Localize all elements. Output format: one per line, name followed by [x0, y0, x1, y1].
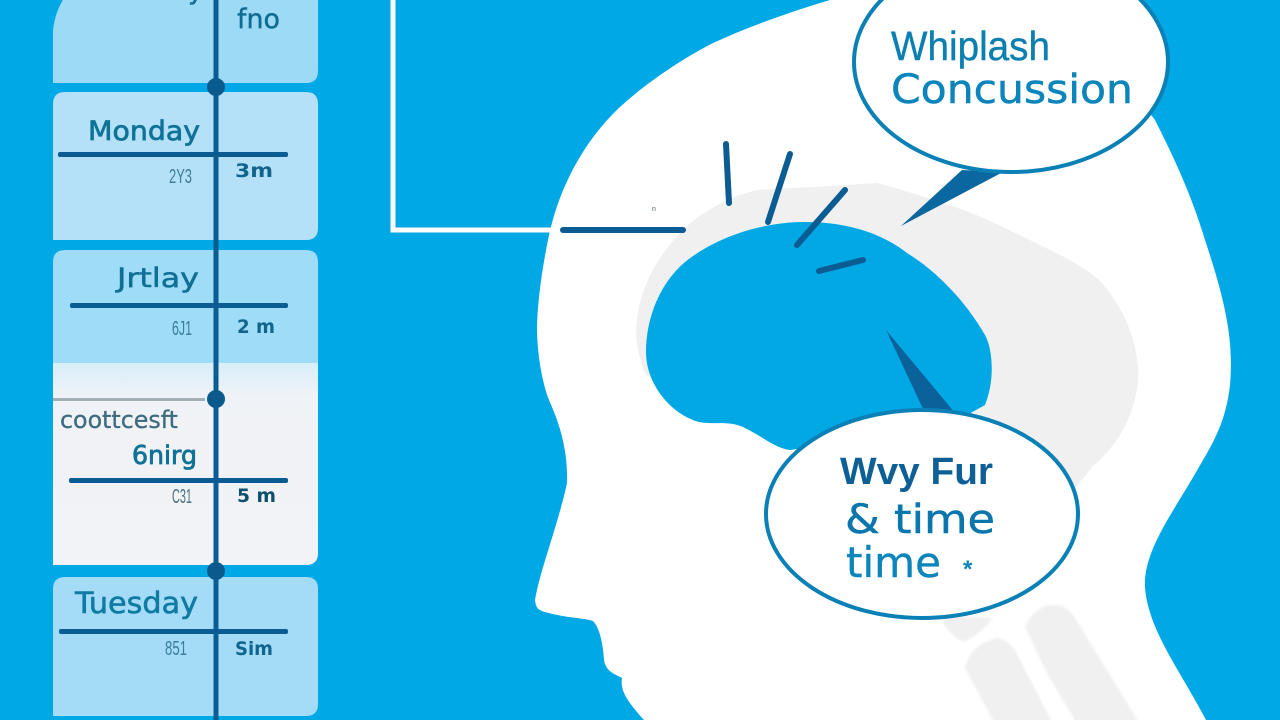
callout: Whiplash Concussion — [854, 0, 1168, 172]
card: Monday — [53, 92, 318, 240]
callout tail: whiplash — [901, 170, 1003, 226]
impact marks — [563, 144, 863, 271]
callout: Whiplash Concussion: Whiplash — [891, 23, 1050, 69]
card: top partial — [53, 0, 318, 83]
card: Tuesday — [53, 577, 318, 716]
brain — [646, 222, 992, 450]
card: Jrtlay — [53, 250, 318, 364]
card: Tuesday: 851 — [165, 638, 187, 660]
callout: Whiplash Concussion: Concussion — [891, 67, 1133, 113]
card: white highlighted: C31 — [172, 486, 192, 508]
card: Tuesday: Tuesday — [74, 586, 198, 620]
card: top partial: fno — [237, 4, 280, 35]
gray skull shading — [636, 183, 1138, 520]
timeline axis — [207, 0, 225, 720]
card: Jrtlay: Jrtlay — [115, 263, 199, 294]
callout: time: * — [963, 556, 973, 583]
card: Monday: 2Y3 — [169, 166, 192, 188]
card: Jrtlay: 2 m — [237, 316, 275, 338]
callout tail: time — [886, 330, 955, 413]
panel: schedule timeline — [53, 0, 318, 720]
callout: time: time — [846, 538, 941, 587]
card: Tuesday: Sim — [235, 638, 273, 660]
card: Monday: 3m — [235, 160, 273, 182]
callout: time: & time — [845, 497, 995, 543]
card: Jrtlay: 6J1 — [172, 318, 192, 340]
neck vertebrae — [943, 605, 1140, 720]
connector line — [393, 0, 556, 230]
card: white highlighted: coottcesft — [60, 406, 178, 434]
stray mark: n — [652, 206, 656, 213]
card: Monday: Monday — [88, 116, 200, 147]
callout: time: Wvy Fur — [840, 451, 993, 493]
card: white highlighted: 6nirg — [132, 441, 197, 471]
callout: time — [766, 410, 1078, 618]
card: white highlighted — [53, 363, 318, 565]
card: white highlighted: 5 m — [237, 485, 276, 507]
head silhouette — [535, 0, 1231, 720]
